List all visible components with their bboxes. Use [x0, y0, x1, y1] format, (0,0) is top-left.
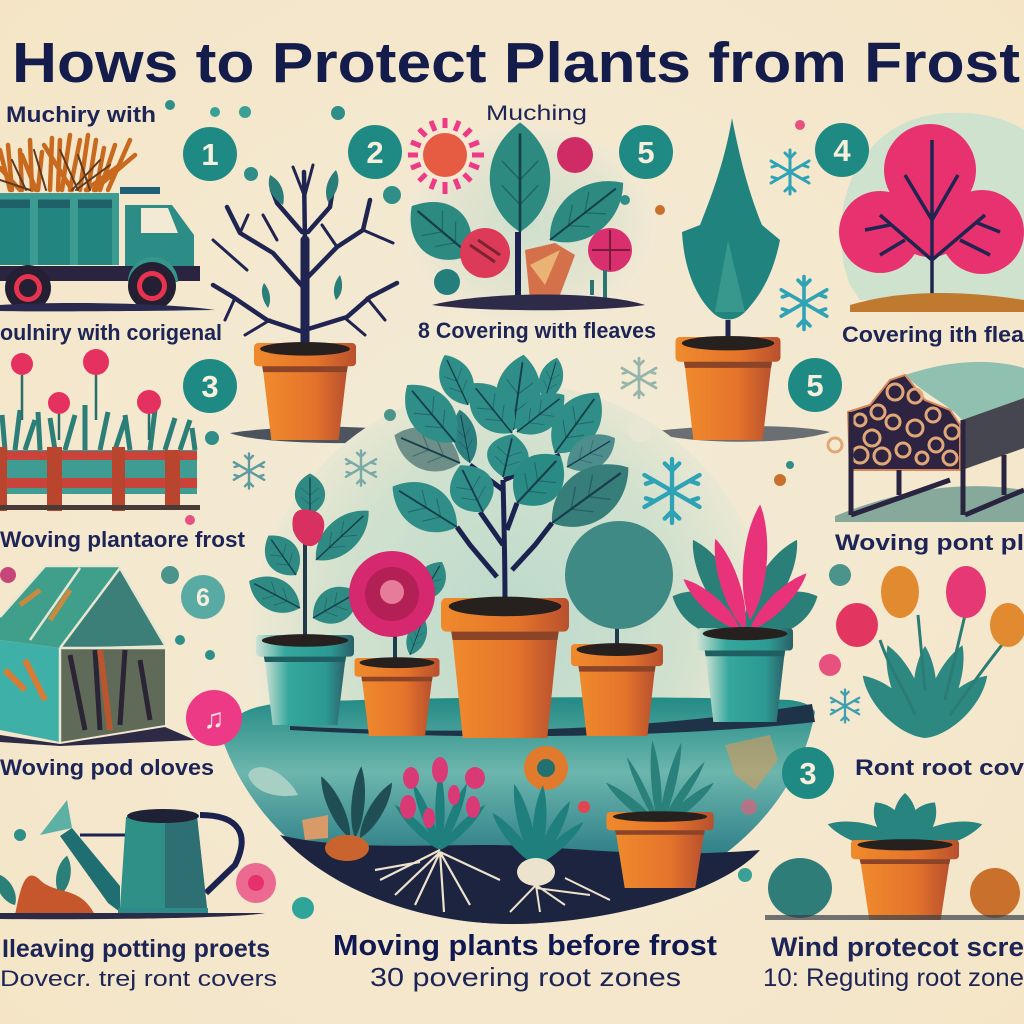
sketches: [725, 735, 778, 790]
icon: tulip plant: [241, 473, 380, 725]
caption: Woving pod oloves: [0, 755, 214, 780]
icon: pink burst: [236, 863, 276, 903]
caption: Moving plants before frost: [333, 930, 717, 962]
pale cactus: [248, 767, 298, 796]
icon: sun: [408, 118, 484, 194]
number badges: 5: [806, 368, 824, 403]
number badges: 4: [833, 133, 851, 168]
panel: cypress in pot: [650, 118, 830, 442]
decorative speckles: [0, 100, 851, 919]
caption: 10: Reguting root zone: [763, 964, 1024, 992]
caption: 8 Covering with fleaves: [418, 318, 656, 343]
icon: central tree: [381, 348, 643, 602]
number badges: ♫: [204, 703, 224, 734]
potted aloe: [603, 740, 717, 832]
caption: Dovecr. trej ront covers: [0, 966, 277, 991]
number badges: [181, 123, 869, 799]
icon: mulch: [0, 854, 74, 908]
shadow: [0, 303, 215, 311]
icon: rose plant: [349, 551, 454, 736]
number badges: 2: [366, 135, 384, 170]
halo circle: [250, 383, 774, 907]
icon: hay load: [0, 135, 135, 190]
panel: mulching truck: [0, 135, 215, 311]
pot shadow band: [290, 704, 815, 736]
halo: [405, 125, 655, 325]
small potted plant: [315, 766, 398, 841]
number badges: 6: [196, 584, 210, 612]
branches: [865, 140, 1000, 305]
icon: rose: [557, 137, 593, 173]
panel: greenhouse: [0, 566, 195, 746]
icon: log pile: [848, 375, 960, 470]
orange flower: [524, 746, 568, 790]
icon: frame: [851, 412, 1024, 515]
panel: flower plant with sun: [395, 118, 655, 325]
blooms: [460, 228, 510, 278]
label: mulching 2: Muching: [486, 102, 587, 125]
tulips with roots: [391, 770, 489, 853]
bottom captions: [0, 930, 1024, 992]
icon: fence: [0, 450, 197, 494]
ground: [222, 697, 815, 924]
icon: cover: [905, 362, 1024, 420]
panel: central scene: [222, 348, 825, 924]
title: Hows to Protect Plants from Frost: [12, 31, 1020, 95]
panel: tulips: [836, 566, 1024, 747]
caption: oulniry with corigenal: [0, 320, 222, 345]
icon: plants: [2, 405, 195, 450]
bulb plant: [488, 782, 587, 869]
panel: shed: [828, 362, 1024, 522]
caption: 30 povering root zones: [370, 962, 681, 992]
number badges: 5: [637, 135, 655, 170]
icon: cypress: [682, 118, 780, 320]
shadow: [230, 427, 425, 443]
panel: garden fence: [0, 349, 200, 511]
icon: pot: [254, 342, 356, 440]
soil: [280, 835, 760, 924]
caption: Ront root cov: [855, 755, 1024, 780]
leaves: [395, 122, 637, 275]
number badges: 3: [201, 369, 219, 404]
icon: bottom plants: [248, 735, 778, 912]
number badges: 3: [799, 756, 817, 791]
canopy: [839, 124, 1024, 274]
label: mulching: Muchiry with: [6, 102, 156, 127]
panel: bottom-right pot: [765, 793, 1024, 920]
panel: bare tree in pot: [213, 165, 425, 443]
caption: Covering ith flea: [842, 322, 1024, 347]
number badges: 1: [201, 137, 219, 172]
panel: pink tree: [839, 113, 1024, 312]
icon: big pot: [441, 597, 569, 738]
icon: pot: [676, 336, 780, 440]
icon: greenhouse: [0, 566, 120, 648]
ground: [835, 486, 1024, 522]
icon: topiary: [565, 521, 673, 736]
shadow: [650, 426, 830, 442]
caption: Woving pont pl: [835, 530, 1024, 555]
icon: can: [60, 828, 120, 912]
icon: truck: [0, 187, 200, 311]
caption: Wind protecot scre: [771, 932, 1024, 962]
halo: [841, 113, 1024, 300]
caption: Woving plantaore frost: [0, 527, 246, 552]
icon: pink foliage plant: [665, 503, 825, 722]
panel: watering can: [0, 800, 276, 919]
icon: bare tree: [213, 165, 397, 350]
icons: snowflakes: [234, 150, 859, 722]
caption: Ileaving potting proets: [2, 935, 270, 963]
